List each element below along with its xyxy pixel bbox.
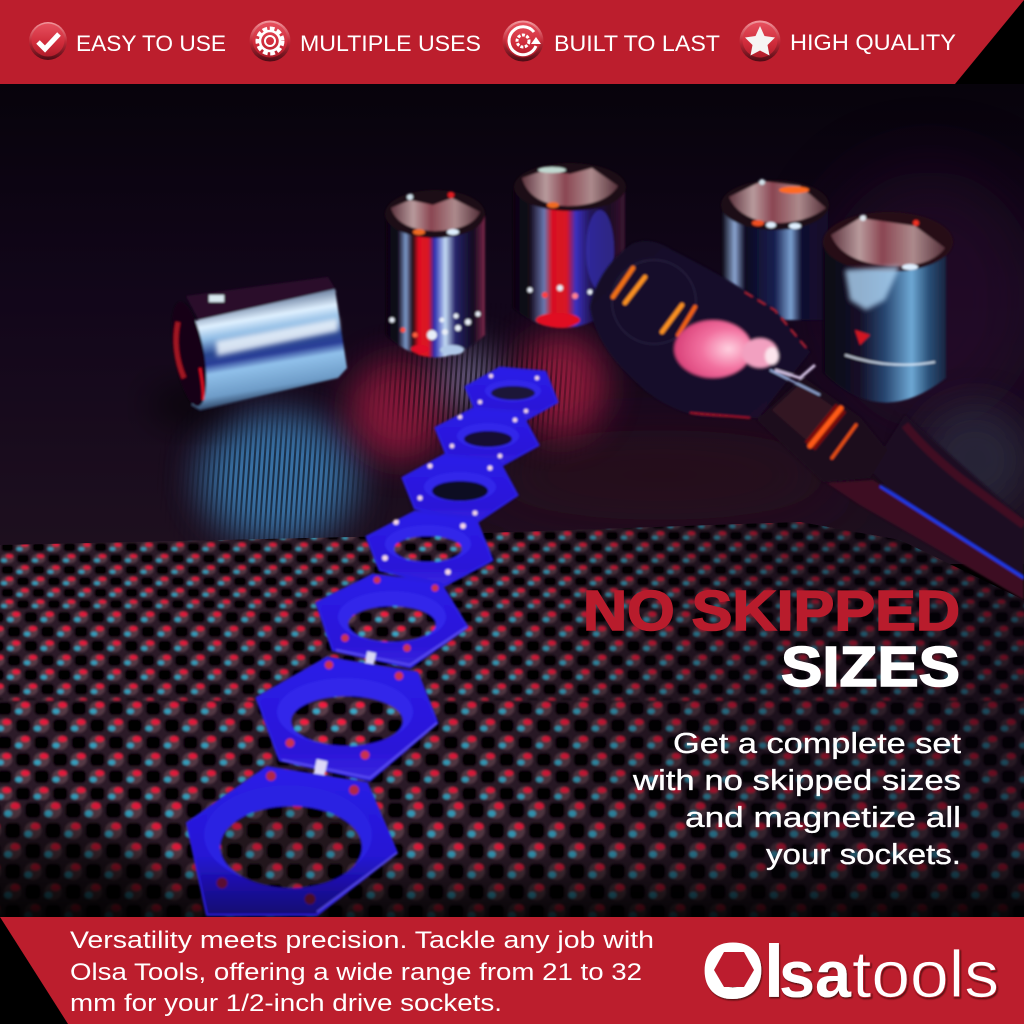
hex link 4 <box>367 512 492 585</box>
socket lying on its side <box>150 277 347 423</box>
hex link 3 <box>317 575 467 667</box>
socket upright 4 <box>823 212 953 403</box>
body copy <box>632 728 961 871</box>
logo: Olsatools: O <box>703 929 763 1013</box>
handle <box>827 415 1024 600</box>
connector tab <box>313 759 328 777</box>
hex link 5 <box>403 455 517 523</box>
body copy: your sockets. <box>766 839 961 871</box>
heading: NO SKIPPED <box>583 579 960 643</box>
hex link 1 <box>187 767 397 915</box>
description text: Olsa Tools, offering a wide range from 21 to 32 <box>70 959 642 986</box>
body copy: with no skipped sizes <box>632 765 961 797</box>
description text <box>70 927 654 1017</box>
socket upright 1 <box>385 190 485 358</box>
magnetic holder: hexagon links <box>187 368 557 915</box>
reflection on head <box>674 320 779 378</box>
socket upright 2 <box>513 163 626 328</box>
feature: easy to use: EASY TO USE <box>76 31 226 56</box>
logo: Olsatools: sa <box>779 937 852 1011</box>
logo: Olsatools: l <box>764 930 784 1013</box>
top banner <box>0 0 1024 84</box>
heading <box>583 579 960 699</box>
feature: multiple uses: MULTIPLE USES <box>300 31 481 56</box>
feature: multiple uses <box>250 20 481 62</box>
icon: star <box>740 20 780 62</box>
feature: easy to use <box>29 22 226 60</box>
logo: Olsatools: tools <box>852 937 999 1011</box>
icon: check mark <box>29 22 67 60</box>
heading: SIZES <box>781 635 960 699</box>
hex link 6 <box>436 408 538 466</box>
ratchet head <box>590 241 810 418</box>
icon: gear <box>250 20 290 62</box>
connector tab <box>365 651 376 665</box>
banner shape <box>0 0 1024 84</box>
ratchet neck <box>757 365 887 482</box>
feature: high quality <box>740 20 956 62</box>
dark work surface <box>0 84 1024 600</box>
ratchet wrench <box>590 241 1024 600</box>
bottom banner <box>0 917 1024 1024</box>
logo: Olsatools <box>703 929 999 1013</box>
hex link 7 <box>466 368 557 420</box>
hex link 2 <box>257 658 437 780</box>
banner shape <box>0 917 1024 1024</box>
socket upright 3 <box>721 179 829 320</box>
icon: gear with arrow <box>502 20 544 62</box>
description text: Versatility meets precision. Tackle any job with <box>70 927 654 954</box>
feature: built to last: BUILT TO LAST <box>554 31 720 56</box>
rubber mat <box>0 515 1024 940</box>
feature: built to last <box>502 20 720 62</box>
body copy: Get a complete set <box>673 728 961 760</box>
text block: no skipped sizes <box>583 579 961 871</box>
feature: high quality: HIGH QUALITY <box>790 30 956 55</box>
body copy: and magnetize all <box>685 802 961 834</box>
description text: mm for your 1/2-inch drive sockets. <box>70 990 502 1017</box>
